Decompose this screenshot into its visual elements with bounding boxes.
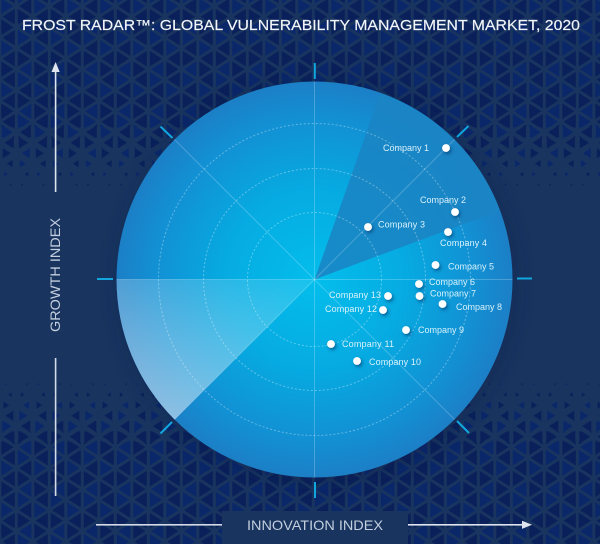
company 2 <box>420 195 466 216</box>
company 8: Company 8 <box>456 302 502 312</box>
arrow: growth axis upward <box>52 62 60 192</box>
tick marks <box>97 63 532 498</box>
company 4: Company 4 <box>440 238 487 248</box>
box: innovation index: INNOVATION INDEX <box>247 517 384 533</box>
company 10: Company 10 <box>369 357 421 367</box>
company 7 <box>416 288 476 300</box>
innovation axis left line <box>96 524 222 526</box>
company 8 <box>439 300 502 312</box>
sector: darker north-east wedge <box>314 93 500 280</box>
company 2: Company 2 <box>420 195 466 205</box>
rings <box>158 124 470 436</box>
company 7: Company 7 <box>430 288 476 298</box>
company 6: Company 6 <box>429 277 475 287</box>
arrow: innovation axis rightward <box>408 521 532 529</box>
growth axis lower line <box>55 358 56 496</box>
company 9: Company 9 <box>418 325 464 335</box>
company 4 <box>440 228 487 248</box>
company 3: Company 3 <box>378 220 425 230</box>
disc shadow <box>118 83 516 481</box>
radar disc <box>116 82 512 478</box>
radar chart <box>97 63 532 498</box>
company 13: Company 13 <box>329 290 381 300</box>
company 1 <box>383 143 450 153</box>
company 5: Company 5 <box>448 262 494 272</box>
axis label: growth index: GROWTH INDEX <box>47 217 63 332</box>
company 1: Company 1 <box>383 143 429 153</box>
sector: light south-west wedge <box>116 280 314 420</box>
company 11: Company 11 <box>342 339 394 349</box>
axes <box>116 82 512 478</box>
company 12: Company 12 <box>325 304 377 314</box>
box: innovation index <box>222 511 408 544</box>
company 3 <box>364 220 425 231</box>
title: FROST RADAR™: GLOBAL VULNERABILITY MANAGEMENT MARKET, 2020 <box>22 18 580 34</box>
